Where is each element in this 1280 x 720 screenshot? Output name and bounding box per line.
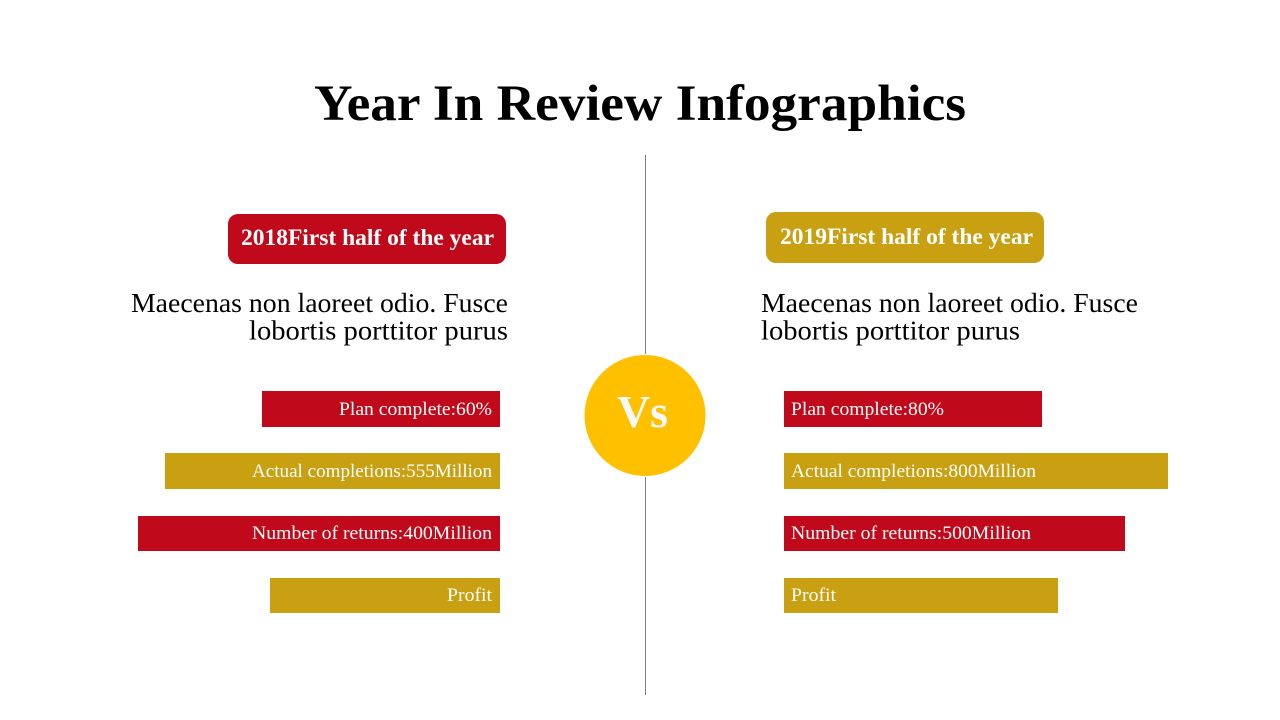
2019 bar: profit: Profit <box>791 585 837 606</box>
2019 description <box>761 288 1138 346</box>
2018 heading badge <box>228 214 506 264</box>
2019 bar: profit <box>784 578 1058 613</box>
2019 bar: actual completions: Actual completions:800Million <box>791 461 1037 482</box>
2019 description: lobortis porttitor purus <box>761 316 1020 346</box>
2018 bar: number of returns <box>138 516 500 551</box>
2018 bar: actual completions <box>165 453 500 489</box>
2019 bar: plan complete: Plan complete:80% <box>791 399 944 420</box>
2019 description: Maecenas non laoreet odio. Fusce <box>761 288 1138 318</box>
2018 bar: plan complete <box>262 391 500 427</box>
2018 bar: profit: Profit <box>447 585 493 606</box>
2018 description: lobortis porttitor purus <box>249 316 508 346</box>
2018 bar: plan complete: Plan complete:60% <box>339 399 492 420</box>
2018 bar: actual completions: Actual completions:555Million <box>252 461 492 482</box>
2019 bar: actual completions <box>784 453 1168 489</box>
2018 heading badge: 2018First half of the year <box>241 225 494 250</box>
2018 bar: profit <box>270 578 500 613</box>
2018 bar: number of returns: Number of returns:400Million <box>252 523 493 544</box>
Vs circle: Vs <box>617 387 668 437</box>
Vs circle <box>584 354 706 476</box>
panel: 2018 <box>131 214 508 613</box>
2019 heading badge <box>766 212 1044 263</box>
title: Year In Review Infographics <box>314 76 966 132</box>
2019 heading badge: 2019First half of the year <box>780 224 1033 249</box>
2018 description: Maecenas non laoreet odio. Fusce <box>131 288 508 318</box>
2018 description <box>131 288 508 346</box>
2019 bar: number of returns: Number of returns:500Million <box>791 523 1032 544</box>
2019 bar: plan complete <box>784 391 1042 427</box>
2019 bar: number of returns <box>784 516 1125 551</box>
panel: 2019 <box>761 212 1168 613</box>
